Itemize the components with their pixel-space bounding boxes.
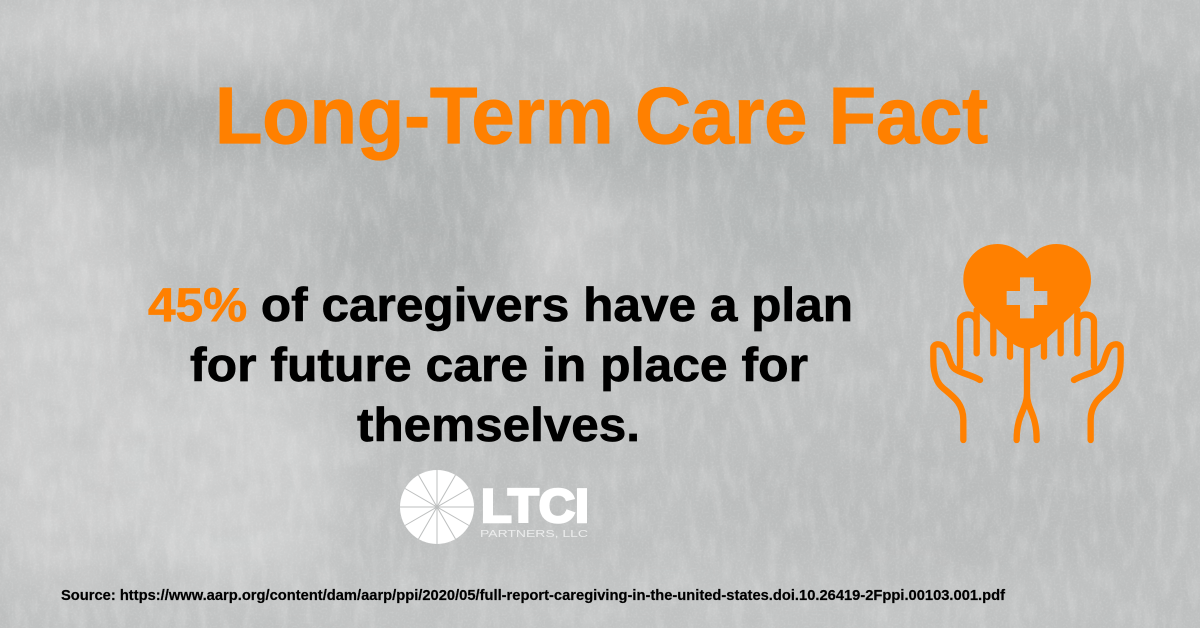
heart [963,244,1091,349]
logo: LTCI Partners [400,470,589,544]
stem [1017,348,1037,440]
logo wordmark: LTCI [481,479,589,532]
right hand [1044,310,1121,440]
title: Long-Term Care Fact [215,71,988,160]
source citation: Source: https://www.aarp.org/content/dam/aarp/ppi/2020/05/full-report-caregiving-in-the-united-states.doi.10.26419-2Fppi.00103.001.pdf [61,588,1005,604]
left hand [933,310,1010,440]
icon: hands holding heart with cross [933,244,1121,440]
fact line 2: for future care in place for [190,338,808,391]
fact line 1: 45% of caregivers have a plan [148,278,853,331]
logo wheel [400,470,474,544]
fact line 3: themselves. [357,398,640,451]
logo subtitle: PARTNERS, LLC [480,529,588,540]
fact text [148,278,853,451]
